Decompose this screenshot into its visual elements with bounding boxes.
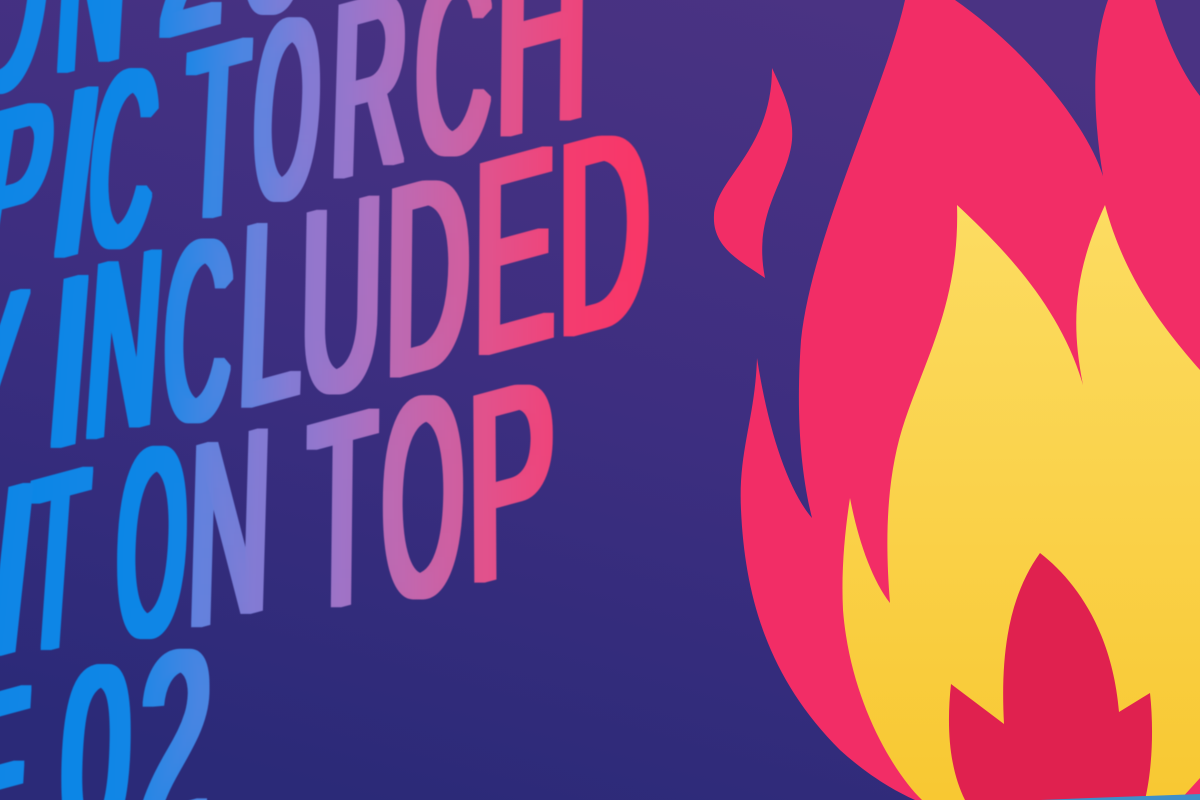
text line: PIC TORCH: C: [81, 11, 165, 306]
text line: Y INCLUDED: I: [37, 221, 102, 501]
light blue strip at the bottom edge: [1040, 794, 1200, 800]
text line: Y INCLUDED: L: [235, 159, 307, 464]
text line: Y INCLUDED: U: [299, 139, 384, 457]
text line: Y INCLUDED: N: [79, 197, 168, 493]
text line: IT ON TOP: P: [467, 319, 556, 640]
flame outer red body: [741, 0, 1200, 800]
text line: Y INCLUDED: D: [385, 114, 471, 436]
text line: Y INCLUDED: C: [160, 181, 236, 482]
icon: large flame: [741, 0, 1200, 800]
flame yellow core: [842, 205, 1200, 800]
text line: Y INCLUDED: E: [474, 87, 555, 414]
text line: IT ON TOP: T: [18, 416, 94, 709]
text line: IT ON TOP: N: [186, 373, 273, 683]
text line: E 02: [0, 590, 216, 800]
text line: Y INCLUDED: [0, 67, 650, 528]
text line: PIC TORCH: I: [39, 32, 114, 310]
text line: IT ON TOP: O: [383, 331, 463, 666]
text line: IT ON TOP: [0, 319, 556, 709]
flame inner red tip: [949, 553, 1152, 800]
text line: IT ON TOP: T: [307, 352, 377, 670]
text line: IT ON TOP: O: [113, 385, 191, 701]
icon: small detached flame: [714, 68, 792, 278]
text line: PIC TORCH: [0, 0, 590, 324]
text line: ON 20: [0, 0, 315, 153]
text line: Y INCLUDED: D: [558, 67, 650, 396]
